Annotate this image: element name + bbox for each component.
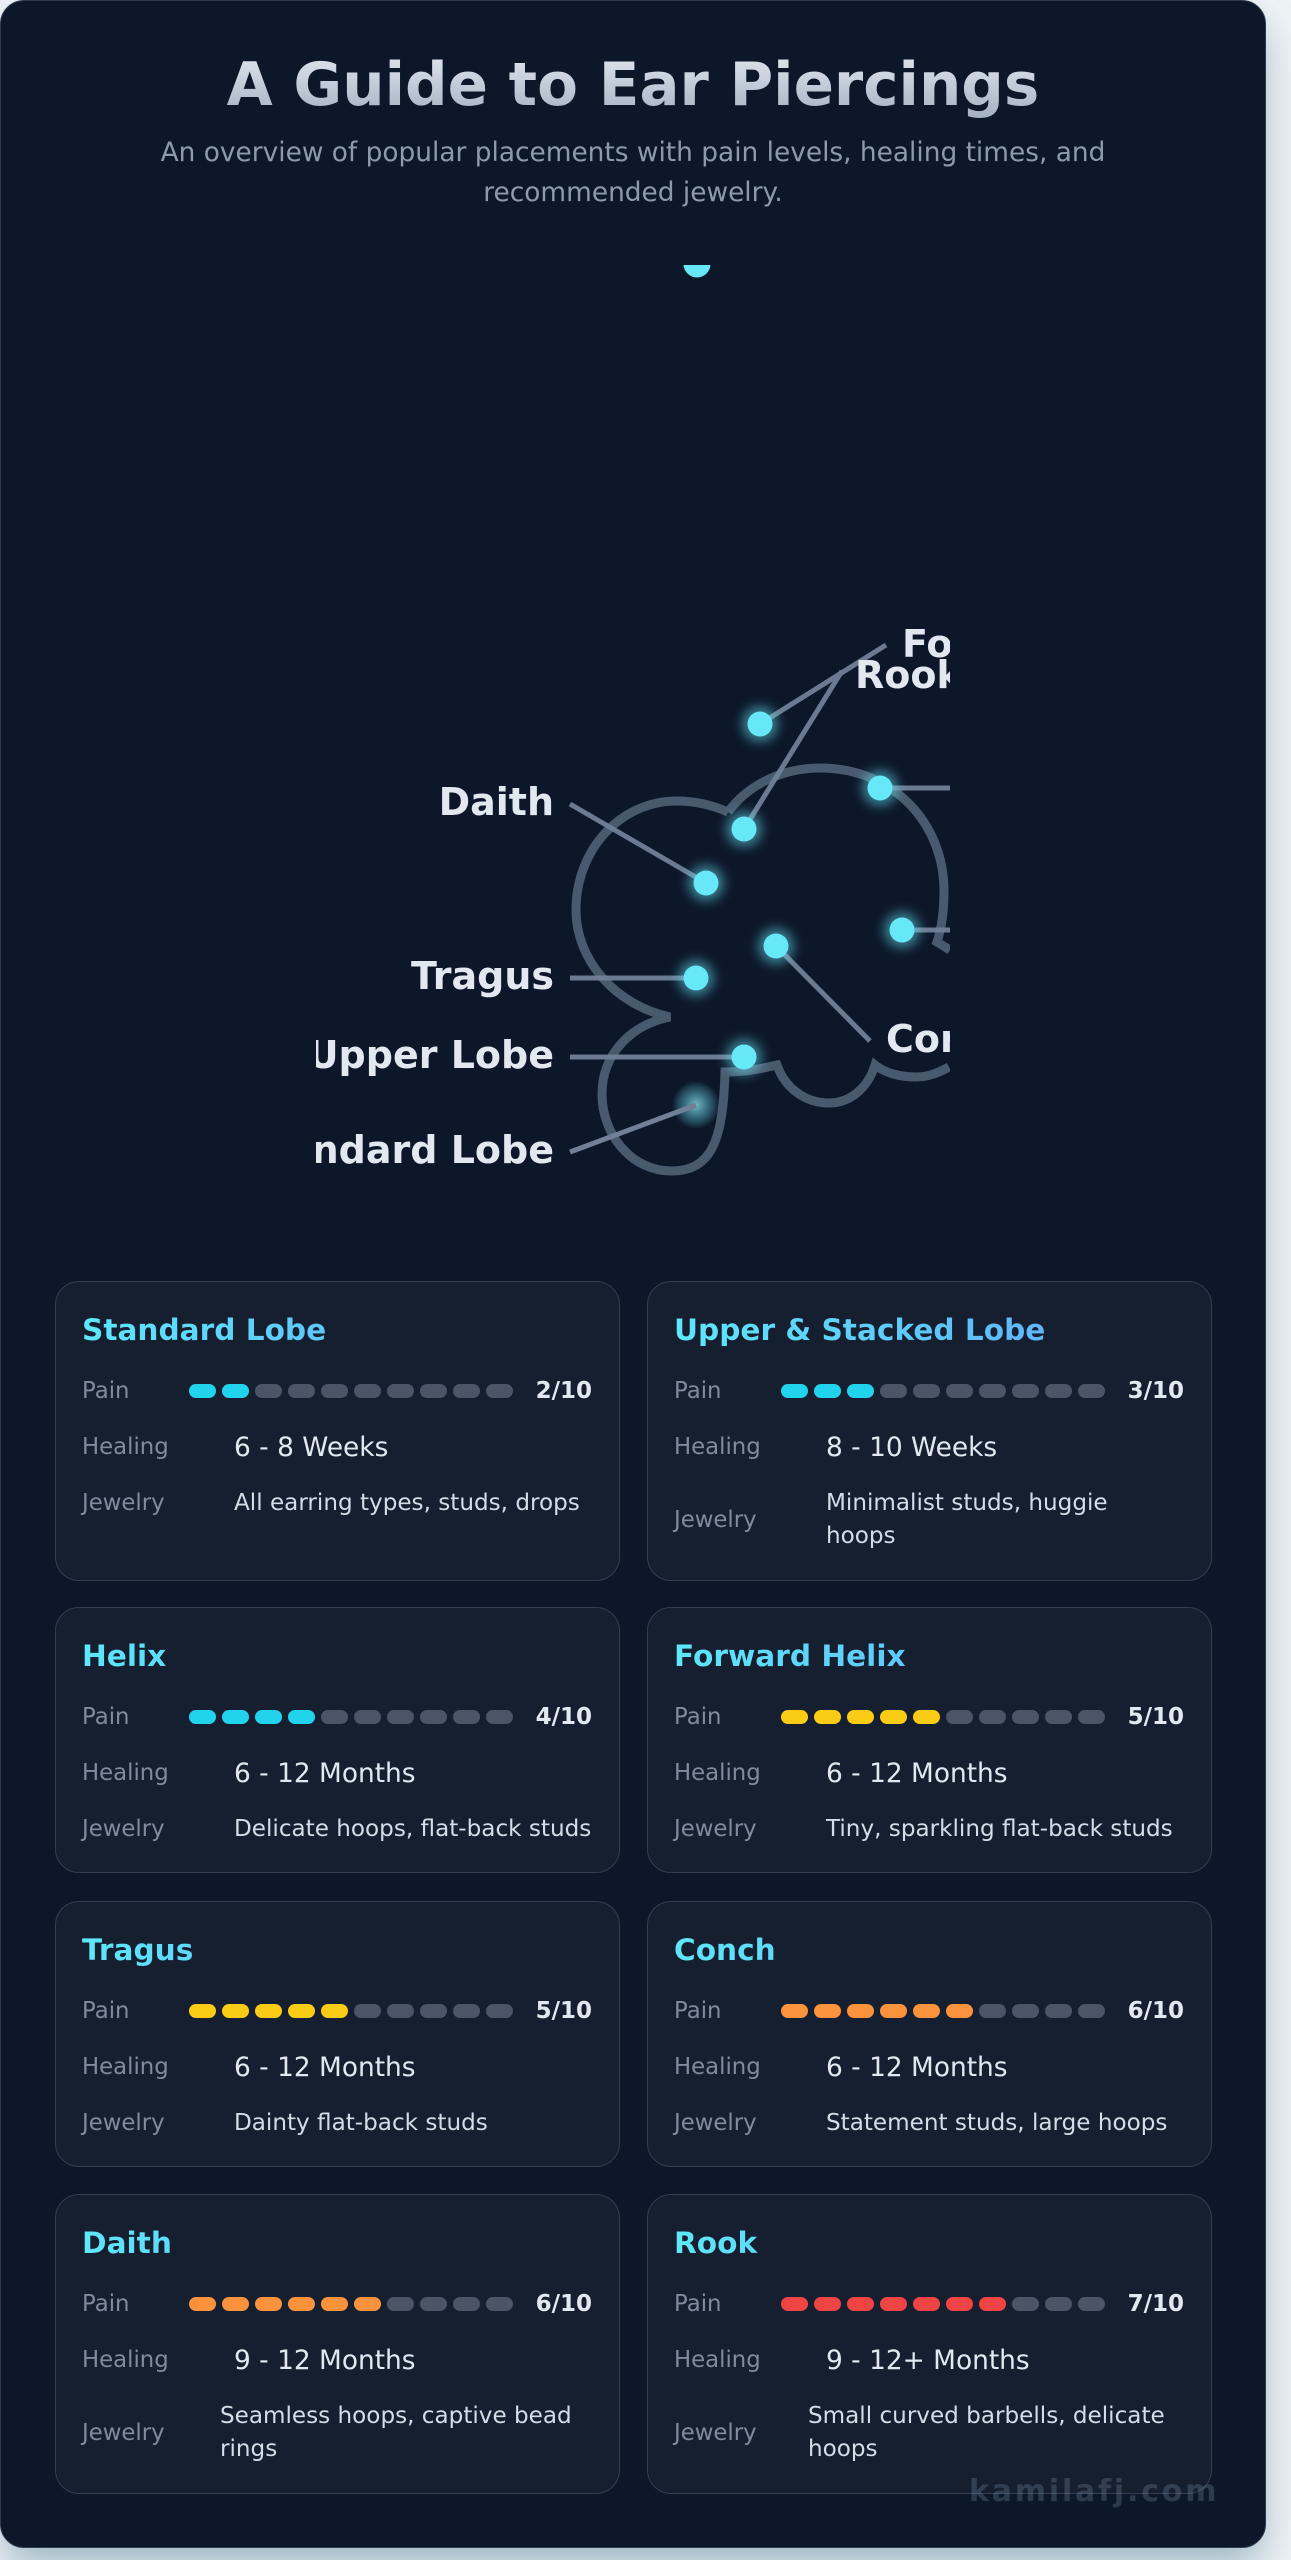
top clipped marker bbox=[684, 265, 710, 278]
leader lines bbox=[570, 645, 950, 1057]
heading: Daith bbox=[82, 2226, 172, 2260]
heading: Tragus bbox=[82, 1933, 193, 1967]
label: Daith: Daith bbox=[439, 780, 554, 824]
pain score: 5/10 bbox=[1128, 1704, 1184, 1730]
card: Tragus bbox=[55, 1901, 620, 2167]
healing value: 6 - 8 Weeks bbox=[234, 1432, 388, 1463]
pain meter bbox=[781, 1710, 1105, 1724]
pain label: Pain bbox=[674, 1998, 721, 2024]
title: A Guide to Ear Piercings bbox=[227, 51, 1039, 120]
pain meter bbox=[781, 2297, 1105, 2311]
heading bbox=[674, 1636, 1184, 1676]
jewelry value bbox=[826, 1490, 1108, 1549]
heading: Conch bbox=[674, 1933, 776, 1967]
card: Forward Helix bbox=[647, 1607, 1212, 1873]
heading: Forward Helix bbox=[674, 1639, 906, 1673]
label: Rook: Rook bbox=[855, 653, 962, 697]
healing label: Healing bbox=[82, 1760, 169, 1786]
pain label: Pain bbox=[82, 1998, 129, 2024]
jewelry value: Seamless hoops, captive bead bbox=[220, 2403, 572, 2429]
pain meter bbox=[189, 2297, 513, 2311]
ear diagram bbox=[316, 265, 950, 1176]
pain score: 2/10 bbox=[536, 1378, 592, 1404]
jewelry value: Statement studs, large hoops bbox=[826, 2110, 1167, 2136]
jewelry value: All earring types, studs, drops bbox=[234, 1490, 580, 1516]
standard lobe line bbox=[570, 1105, 696, 1152]
healing value: 6 - 12 Months bbox=[826, 1758, 1008, 1789]
healing value: 9 - 12 Months bbox=[234, 2345, 416, 2376]
jewelry value bbox=[808, 2403, 1165, 2462]
subtitle bbox=[160, 137, 1105, 208]
ear outline bbox=[576, 801, 949, 1171]
jewelry label: Jewelry bbox=[82, 1816, 165, 1842]
healing label: Healing bbox=[674, 2347, 761, 2373]
pain meter bbox=[189, 1384, 513, 1398]
card: Standard Lobe bbox=[55, 1281, 620, 1581]
pain label: Pain bbox=[82, 1704, 129, 1730]
pain score: 7/10 bbox=[1128, 2291, 1184, 2317]
jewelry value: rings bbox=[220, 2436, 277, 2462]
jewelry value: hoops bbox=[826, 1523, 896, 1549]
pain score: 5/10 bbox=[536, 1998, 592, 2024]
jewelry label: Jewelry bbox=[82, 2110, 165, 2136]
card: Rook bbox=[647, 2194, 1212, 2494]
heading bbox=[674, 1310, 1184, 1350]
pain meter bbox=[189, 2004, 513, 2018]
jewelry value bbox=[220, 2403, 572, 2462]
heading bbox=[82, 1310, 592, 1350]
jewelry value: Tiny, sparkling flat-back studs bbox=[826, 1816, 1173, 1842]
label: Conch: Conch bbox=[886, 1017, 1017, 1061]
heading: Helix bbox=[82, 1639, 166, 1673]
pain label: Pain bbox=[674, 1378, 721, 1404]
healing label: Healing bbox=[674, 1760, 761, 1786]
heading: Rook bbox=[674, 2226, 757, 2260]
pain label: Pain bbox=[82, 2291, 129, 2317]
jewelry value: hoops bbox=[808, 2436, 878, 2462]
jewelry value: Dainty flat-back studs bbox=[234, 2110, 488, 2136]
pain meter bbox=[189, 1710, 513, 1724]
jewelry value: Minimalist studs, huggie bbox=[826, 1490, 1108, 1516]
healing value: 6 - 12 Months bbox=[826, 2052, 1008, 2083]
card: Conch bbox=[647, 1901, 1212, 2167]
label: Standard Lobe: Standard Lobe bbox=[240, 1128, 554, 1172]
jewelry label: Jewelry bbox=[674, 1816, 757, 1842]
jewelry label: Jewelry bbox=[82, 1490, 165, 1516]
healing label: Healing bbox=[82, 2054, 169, 2080]
heading bbox=[674, 1930, 1184, 1970]
standard lobe marker bbox=[672, 1081, 720, 1129]
healing value: 6 - 12 Months bbox=[234, 2052, 416, 2083]
jewelry label: Jewelry bbox=[674, 1507, 757, 1533]
healing value: 9 - 12+ Months bbox=[826, 2345, 1030, 2376]
card: Upper & Stacked Lobe bbox=[647, 1281, 1212, 1581]
healing label: Healing bbox=[674, 1434, 761, 1460]
heading bbox=[82, 1636, 592, 1676]
card: Helix bbox=[55, 1607, 620, 1873]
healing label: Healing bbox=[82, 1434, 169, 1460]
pain score: 6/10 bbox=[536, 2291, 592, 2317]
heading: Upper & Stacked Lobe bbox=[674, 1313, 1045, 1347]
card: Daith bbox=[55, 2194, 620, 2494]
ear upper outline bbox=[728, 768, 950, 950]
healing label: Healing bbox=[674, 2054, 761, 2080]
title bbox=[1, 50, 1265, 122]
heading bbox=[82, 1930, 592, 1970]
heading bbox=[674, 2223, 1184, 2263]
piercing markers bbox=[678, 706, 920, 1075]
jewelry label: Jewelry bbox=[674, 2110, 757, 2136]
pain score: 6/10 bbox=[1128, 1998, 1184, 2024]
watermark: kamilafj.com bbox=[969, 2474, 1219, 2509]
healing value: 8 - 10 Weeks bbox=[826, 1432, 997, 1463]
label: Forward Helix: Forward Helix bbox=[902, 622, 1199, 666]
pain label: Pain bbox=[674, 2291, 721, 2317]
heading: Standard Lobe bbox=[82, 1313, 326, 1347]
subtitle: An overview of popular placements with pain levels, healing times, and bbox=[161, 137, 1105, 168]
healing value: 6 - 12 Months bbox=[234, 1758, 416, 1789]
jewelry label: Jewelry bbox=[674, 2420, 757, 2446]
jewelry label: Jewelry bbox=[82, 2420, 165, 2446]
pain label: Pain bbox=[82, 1378, 129, 1404]
pain score: 4/10 bbox=[536, 1704, 592, 1730]
subtitle: recommended jewelry. bbox=[483, 177, 783, 208]
pain meter bbox=[781, 1384, 1105, 1398]
healing label: Healing bbox=[82, 2347, 169, 2373]
jewelry value: Delicate hoops, flat-back studs bbox=[234, 1816, 591, 1842]
label: Upper Lobe: Upper Lobe bbox=[308, 1033, 554, 1077]
pain meter bbox=[781, 2004, 1105, 2018]
pain score: 3/10 bbox=[1128, 1378, 1184, 1404]
jewelry value: Small curved barbells, delicate bbox=[808, 2403, 1165, 2429]
label: Tragus: Tragus bbox=[411, 954, 554, 998]
pain label: Pain bbox=[674, 1704, 721, 1730]
heading bbox=[82, 2223, 592, 2263]
